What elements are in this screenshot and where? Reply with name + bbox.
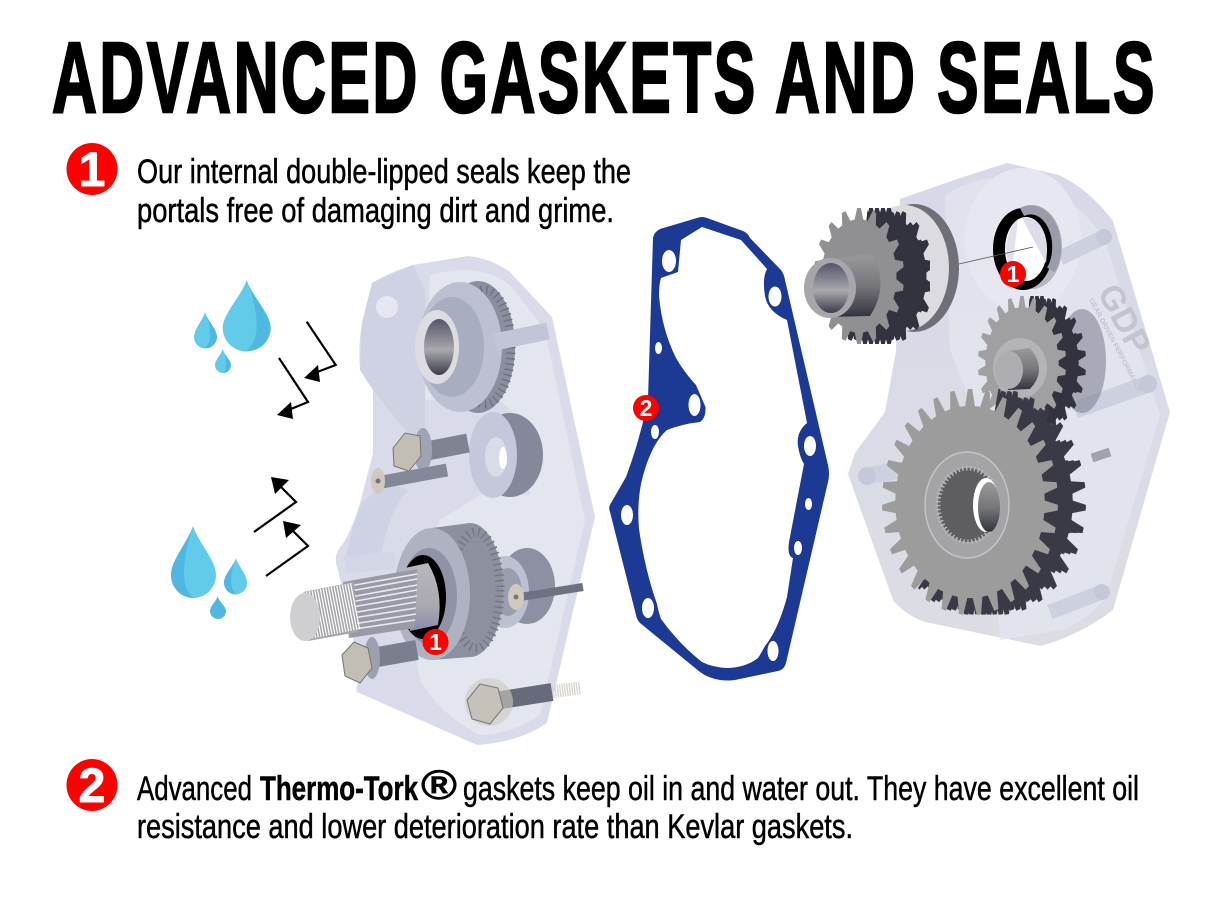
callout 2: gaskets (66, 759, 1139, 846)
badge 2: 2 (79, 760, 105, 813)
middle bearing (469, 412, 543, 498)
seals description text: portals free of damaging dirt and grime. (137, 192, 614, 230)
left housing assembly (290, 256, 595, 745)
small right screw (508, 584, 583, 610)
badge on right housing (1000, 261, 1026, 287)
lower long bolt (465, 678, 580, 726)
badge on left housing (422, 629, 448, 655)
badge 1 (66, 143, 118, 197)
lower bearing (394, 523, 503, 660)
badge on gasket (633, 395, 659, 421)
housing body (848, 163, 1170, 646)
seals description text (137, 153, 631, 230)
output shaft (290, 563, 440, 641)
pin (1092, 452, 1110, 458)
rear gear cylinder (481, 548, 555, 628)
seal ring (959, 205, 1062, 290)
badge on right housing: 1 (1007, 261, 1020, 287)
water drops top group (194, 280, 271, 373)
bolt tubes (858, 229, 1157, 612)
arrows: water deflected (254, 322, 336, 576)
GDP logo (1087, 278, 1158, 394)
GDP logo: GDP (1090, 278, 1158, 361)
callout 1: seals (66, 143, 631, 230)
gaskets description text: Thermo-Tork (260, 770, 418, 808)
water drops bottom group (171, 526, 247, 619)
gaskets description text: resistance and lower deterioration rate than Kevlar gaskets. (137, 808, 853, 846)
upper bearing (415, 281, 515, 413)
GDP logo: GEAR DRIVEN PERFORMANCE (1087, 298, 1143, 394)
lower bolt (342, 637, 417, 683)
badge 1: 1 (79, 144, 105, 197)
gaskets description text: ® (421, 761, 457, 808)
gasket body (609, 217, 829, 680)
gaskets description text (137, 761, 1139, 846)
left rod (345, 560, 395, 565)
screw mid (371, 468, 447, 494)
small gear (978, 296, 1106, 430)
right housing assembly (804, 163, 1170, 646)
pinion gear (804, 204, 959, 344)
badge on left housing: 1 (429, 629, 442, 655)
gaskets description text: Advanced (137, 770, 252, 808)
bolt mid (393, 428, 468, 472)
upper rod (495, 331, 548, 342)
housing body (336, 256, 595, 745)
gasket (609, 217, 829, 680)
badge on gasket: 2 (640, 395, 652, 421)
badge 2 (66, 759, 118, 813)
seals description text: Our internal double-lipped seals keep the (137, 153, 631, 191)
large gear (882, 389, 1086, 615)
